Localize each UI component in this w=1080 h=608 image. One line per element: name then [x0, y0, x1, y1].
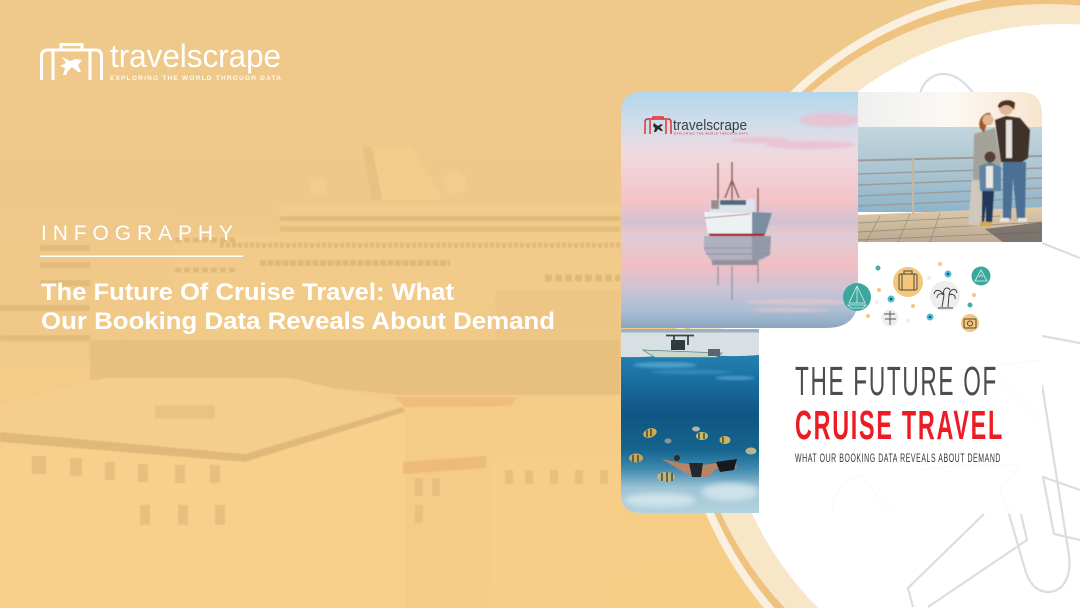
mini logo on ship panel: [645, 117, 748, 136]
image panel: ship on calm water: [621, 92, 860, 329]
icon: signpost: [882, 310, 898, 326]
brand logo: [42, 38, 281, 82]
panel title: [795, 358, 1004, 465]
icon: sailboat: [843, 283, 871, 311]
white circle with concentric bands: [675, 0, 1080, 608]
mini logo on ship panel: EXPLORING THE WORLD THROUGH DATA: [674, 132, 748, 136]
icon cluster: [843, 262, 990, 332]
background line art: suitcase and plane: [908, 74, 1080, 607]
water surface highlights: [633, 362, 755, 380]
logo wordmark: travelscrape: [110, 38, 281, 74]
icon: suitcase with plane: [42, 44, 102, 80]
railing: [858, 156, 1042, 214]
family figures: [968, 100, 1030, 226]
diver: [662, 455, 737, 477]
boat: [643, 336, 722, 358]
deck shadow: [985, 222, 1042, 242]
mini logo on ship panel: travelscrape: [673, 118, 747, 134]
water glints: [621, 226, 858, 312]
clouds: [730, 113, 860, 149]
ship reflection: [704, 236, 771, 300]
main heading: [41, 279, 555, 335]
image panel: family at seaside railing: [858, 92, 1042, 242]
icon: mountain: [972, 266, 990, 286]
fish: [629, 426, 756, 482]
icon: suitcase: [893, 267, 923, 297]
white page panel: [759, 242, 1042, 514]
icon: camera: [961, 314, 979, 332]
icon: palm tree: [930, 281, 960, 311]
ship: [704, 162, 772, 236]
logo tagline: EXPLORING THE WORLD THROUGH DATA: [110, 75, 281, 82]
main heading: Our Booking Data Reveals About Demand: [41, 308, 555, 335]
sandy seabed: [624, 483, 758, 507]
main heading: The Future Of Cruise Travel: What: [41, 279, 454, 306]
eyebrow label: INFOGRAPHY: [41, 222, 233, 245]
decorative dots: [866, 262, 976, 323]
image panel: boat and diver underwater: [621, 329, 759, 513]
